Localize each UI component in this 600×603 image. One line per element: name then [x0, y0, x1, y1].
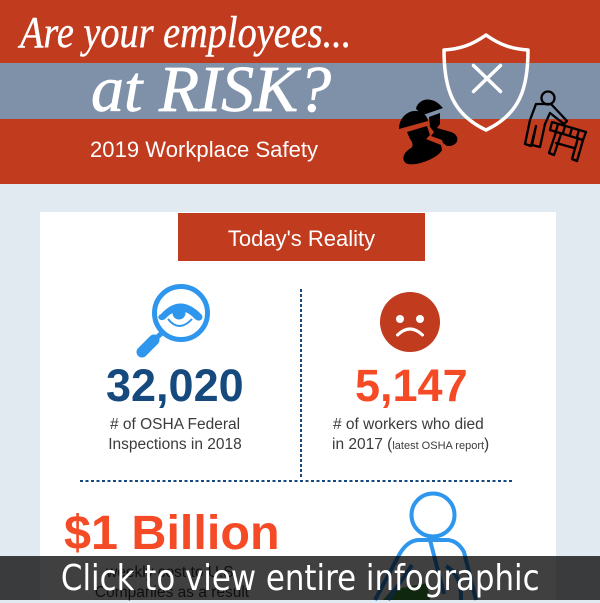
text: weekly cost: Companies as a result: [95, 584, 249, 601]
call to action bar: Click to view entire infographic: [61, 558, 539, 599]
subtitle: 2019 Workplace Safety: [90, 137, 318, 162]
icon: sad face: [380, 292, 440, 352]
text: workers who died: # of workers who died: [333, 416, 484, 433]
text: workers who died: [332, 416, 489, 453]
stat: 5,147: 5,147: [355, 360, 468, 411]
icon: injured person: [373, 492, 478, 602]
horizontal divider: [80, 480, 512, 482]
title: at risk: at RISK?: [91, 53, 331, 126]
text: weekly cost: weekly cost to U.S.: [106, 564, 238, 581]
text: weekly cost: [95, 564, 249, 601]
grey band: [0, 63, 600, 119]
heading: today's reality: Today's Reality: [228, 226, 375, 251]
vertical divider: [300, 289, 302, 479]
stat: 32,020: 32,020: [106, 360, 244, 411]
text: osha inspections: Inspections in 2018: [108, 436, 242, 453]
text: osha inspections: [108, 416, 242, 453]
title: are your employees: Are your employees...: [20, 8, 351, 57]
text: osha inspections: # of OSHA Federal: [110, 416, 240, 433]
heading: today's reality: [178, 213, 425, 261]
stat: $1 billion: $1 Billion: [64, 506, 280, 560]
header banner: [0, 0, 600, 184]
icon: worker with barricade: [524, 90, 588, 162]
icon: magnifying glass with eye: [136, 284, 210, 358]
text: workers who died: in 2017 (latest OSHA report): [332, 436, 489, 453]
icon: workers with hard hats: [399, 100, 458, 164]
icon: shield with x: [442, 33, 530, 132]
white content panel: [40, 212, 556, 600]
